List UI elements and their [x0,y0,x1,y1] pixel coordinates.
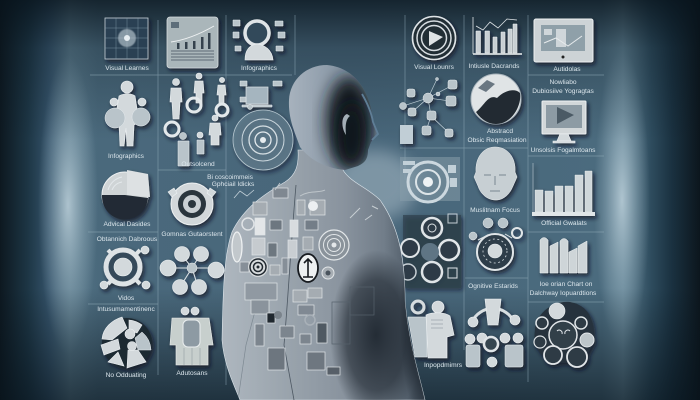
icon: tall bars [532,163,595,216]
icon: node cluster [160,246,224,294]
text: Infographics top: Infographics [241,65,278,72]
text: Infographics left: Infographics [108,153,145,160]
target small [248,257,268,277]
text: Adutosans: Adutosans [176,370,208,377]
icon: pie chart [102,170,150,220]
badge [298,254,318,282]
text: small chart note: Bi coscoimmeis [207,174,254,181]
icon: target with arrows [100,246,150,289]
icon: dial with gears [469,218,522,270]
text: Intiusle Dacrands: Intiusle Dacrands [469,63,520,70]
text: Visual Learnes: Visual Learnes [105,65,149,72]
text: No Odduating: No Odduating [106,372,147,379]
text: Visual Lounrs: Visual Lounrs [414,64,455,71]
torso [222,150,448,400]
back interface panels [232,183,378,375]
text: Obtannich Dabroous: Obtannich Dabroous [97,236,158,243]
ear [342,114,350,135]
text: Ognitive Estarids: Ognitive Estarids [468,283,519,290]
icon: visual grid [105,18,148,59]
text: Outsolcend: Outsolcend [181,161,215,168]
icon: face [474,147,517,200]
text: Nowliabo: Nowliabo [549,79,577,86]
text: small chart note: Gphciail Idicks [212,181,255,188]
text: Ioe orian Chart on: Ioe orian Chart on [540,281,593,288]
icon: broken circle [101,317,152,368]
icon: globe [471,74,521,124]
icon: people and gears [165,73,228,166]
text: Intusumamentinenc: Intusumamentinenc [97,306,155,313]
text: Abstracd: Abstracd [487,128,513,135]
text: Inpopdmimrs: Inpopdmimrs [424,362,463,369]
text: Muslitnam Focus: Muslitnam Focus [470,207,521,214]
icon: 3D bars [540,238,587,273]
text: Autidolas: Autidolas [553,66,581,73]
icon: target play [412,16,456,60]
icon: monitor chart [534,19,593,62]
icon: laptop and target [233,81,293,170]
icon: cluster of circles [534,302,594,367]
icon: chart card [167,17,218,68]
icon: bar chart with trend [473,17,522,54]
text: Gomnas Gutaorstent: Gomnas Gutaorstent [161,231,223,238]
person from behind [222,65,448,400]
icon: person group [105,81,150,146]
face highlight [362,94,378,140]
text: Dubiosiive Yogragtas: Dubiosiive Yogragtas [532,88,594,95]
text: Obsic Reqmasiation: Obsic Reqmasiation [467,137,527,144]
text: Unsolsis Fogalmtoans: Unsolsis Fogalmtoans [531,147,596,154]
icon: bulb machine [465,299,523,367]
text: small chart note [207,174,255,198]
target large [319,230,349,260]
icon: panel dial [400,157,460,202]
icon: video monitor [542,101,586,143]
icon: two people [170,307,213,365]
icon: tiled circle icons [400,214,461,288]
text: Dalchway Iopuardtions: Dalchway Iopuardtions [530,290,597,297]
icon: network [400,78,457,144]
text: Official Gwalats: Official Gwalats [541,220,588,227]
icon: person with nodes [233,20,285,60]
icon: persons panel [408,301,454,358]
icon: gear ring [168,183,216,225]
text: Advical Dasides: Advical Dasides [104,221,151,228]
text: Vidos: Vidos [118,295,135,302]
head [289,65,378,170]
